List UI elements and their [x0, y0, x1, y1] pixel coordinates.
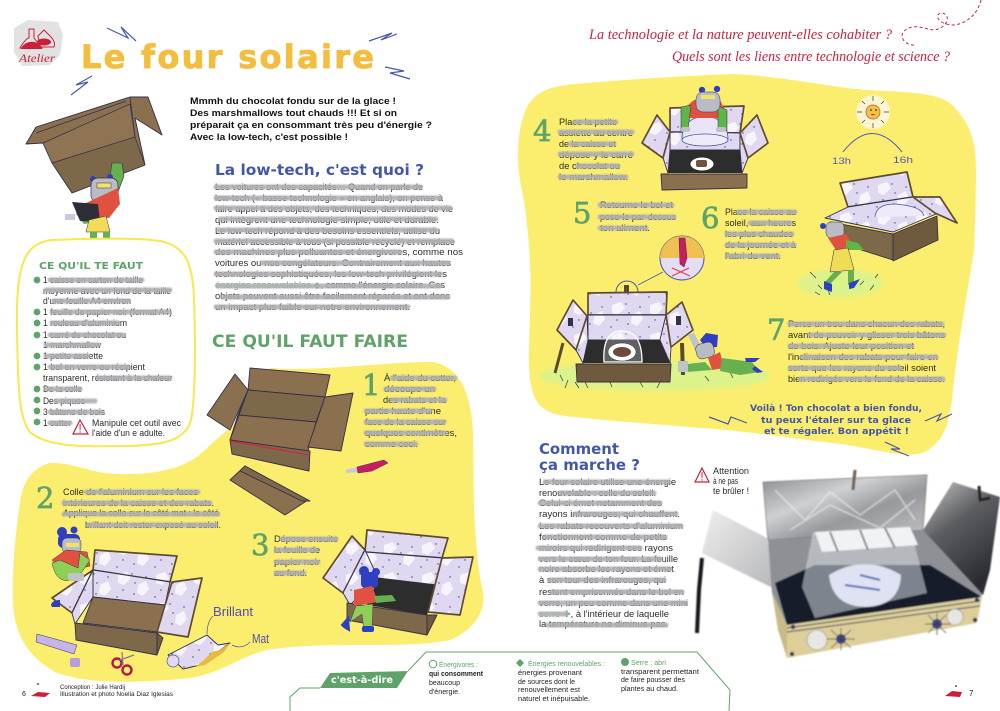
step 6 text: les plus chaudes	[725, 229, 793, 239]
text block: how it works: serre ✚, à l'intérieur de laquelle	[539, 609, 669, 619]
step 4 text: de chocolat ou	[559, 161, 620, 171]
foil roll with labels: Brillant	[213, 604, 253, 619]
text block: low-tech: technologies sophistiquées, les low-tech privilégient les	[215, 269, 447, 279]
icon: sun with time arc: 16h	[893, 155, 913, 165]
step 1 text: découpe un	[384, 384, 435, 394]
page number and credits: left: Illustration et photo Noelia Diaz Iglesias	[60, 691, 173, 698]
step 4 text: Place la petite	[559, 117, 617, 127]
step 2 text: intérieures de la caisse et des rabats.	[63, 498, 214, 508]
page number and credits: left: Conception : Julie Hardij	[60, 684, 125, 691]
step 1 text: quelques centimètres,	[365, 428, 457, 438]
illustration: robot lifting a box	[26, 97, 162, 250]
list text: 3 bâtons de bois	[43, 407, 105, 417]
step 5 text: 5	[573, 196, 591, 230]
step 1 text	[362, 368, 457, 449]
text block: how it works: fonctionnent comme de petits	[539, 532, 667, 542]
heading: comment ça marche: ça marche ?	[539, 456, 640, 474]
definition: serre: plantes au chaud.	[621, 686, 678, 693]
red questions: La technologie et la nature peuvent-elles cohabiter ?	[588, 27, 893, 43]
photo: real solar oven	[697, 470, 1000, 658]
text block: low-tech: des machines plus polluantes et énergivores, comme nos	[215, 247, 463, 257]
page number: right	[945, 685, 974, 698]
title: Le four solaire	[81, 38, 374, 76]
step 1 illustration: cut box	[207, 368, 353, 471]
definition: énergies renouvelables: de sources dont le	[518, 679, 575, 686]
step 7 text: avant de pouvoir y glisser trois bâtons	[788, 330, 945, 340]
cut flap piece	[230, 466, 310, 515]
lightning bolts around title	[71, 27, 410, 95]
text block: low-tech: objets peuvent aussi être facilement réparés et ont donc	[215, 291, 450, 301]
step 6 text: 6	[701, 201, 719, 235]
step 3 illustration: black paper in box	[323, 530, 473, 635]
text block: how it works: rayons infrarouges, qui chauffent.	[539, 509, 680, 519]
step 5 text	[573, 196, 676, 233]
step 6 text: soleil, aux heures	[725, 218, 796, 228]
supplies: glue stick, glue cap, scissors	[36, 634, 134, 674]
red questions: Quels sont les liens entre technologie et science ?	[672, 49, 951, 65]
step 4 text: dépose-y le carré	[559, 150, 633, 160]
step 7 text: sorte que les rayons du soleil soient	[788, 363, 936, 373]
text block: low-tech: énergies renouvelables ◆, comme l'énergie solaire. Ces	[215, 280, 445, 290]
text block: low-tech: qui intègrent une technologie simple, utile et durable.	[215, 215, 439, 225]
logo: Atelier badge	[14, 20, 63, 66]
text block: low-tech	[215, 182, 463, 312]
warning text: Manipule cet outil avec	[92, 418, 181, 428]
step 6 text: l'abri du vent.	[725, 251, 781, 261]
definition: énergivores	[429, 660, 484, 696]
list text: 1 feuille de papier noir (format A4)	[43, 307, 172, 317]
heading: comment ça marche	[539, 440, 640, 474]
foil roll with labels: Mat	[252, 631, 269, 646]
page number and credits: left	[22, 683, 173, 698]
text block: low-tech: Les voitures ont des capacités… Quand on parle de	[215, 182, 423, 192]
step 1 text: face de la caisse sur	[365, 417, 446, 427]
intro text: Mmmh du chocolat fondu sur de la glace !	[190, 96, 396, 107]
step 6 text	[701, 201, 797, 261]
definition: énergivores: beaucoup	[429, 680, 460, 687]
dotted swirl	[902, 0, 981, 45]
step 2 text	[36, 481, 221, 530]
text block: low-tech: voitures ou nos congélateurs. Contrairement aux hautes	[215, 258, 451, 268]
list text: 1 bol en verre ou récipient	[43, 362, 145, 372]
yellow background: right page steps	[518, 74, 976, 455]
step 5 text: Retourne le bol et	[600, 200, 673, 210]
definition: serre	[621, 658, 699, 693]
definition: énergies renouvelables	[516, 659, 605, 703]
warning: do not burn yourself: Attention	[713, 466, 749, 476]
list text: 1 rouleau d'aluminium	[43, 318, 127, 328]
list text	[43, 275, 172, 428]
warning: do not burn yourself	[695, 466, 749, 496]
list text: Des piques	[43, 396, 85, 406]
definition: énergies renouvelables: Énergies renouvelables :	[528, 659, 605, 668]
step 3 text: au fond.	[274, 568, 307, 578]
definition: énergies renouvelables: énergies provenant	[518, 670, 582, 677]
text block: how it works: Les rabats recouverts d'aluminium	[539, 521, 683, 531]
step 6 text: de la journée et à	[725, 240, 797, 250]
intro text: préparait ça en consommant très peu d'énergie ?	[190, 120, 432, 131]
icon: cutter	[345, 460, 388, 473]
definition: énergivores: qui consomment	[429, 671, 484, 678]
definition: serre: Serre : abri	[631, 660, 666, 667]
logo: Atelier badge: Atelier	[18, 51, 55, 65]
text block: how it works: noire absorbe les rayons et émet	[539, 564, 674, 574]
step 1 text: comme ceci.	[365, 439, 418, 449]
list text: 1 marshmallow	[43, 340, 101, 350]
conclusion text: Voilà ! Ton chocolat a bien fondu,	[750, 404, 922, 414]
step 4 text	[533, 114, 633, 182]
heading: CE QU'IL TE FAUT: CE QU'IL TE FAUT	[39, 261, 143, 272]
warning: do not burn yourself: à ne pas	[713, 476, 738, 486]
step 7 text: de bois. Ajuste leur position et	[788, 341, 914, 351]
panel: what you need	[17, 239, 195, 446]
text block: low-tech: Le low-tech répond à des besoins essentiels, utilise du	[215, 226, 440, 236]
outline: definitions box	[290, 652, 730, 711]
text block: how it works	[538, 477, 688, 629]
text block: how it works: miroirs qui redirigent ces rayons	[539, 543, 673, 553]
definition: énergivores: d'énergie.	[429, 689, 460, 696]
red questions	[588, 27, 951, 65]
list text: transparent, résistant à la chaleur	[43, 373, 172, 383]
warning icon	[73, 420, 88, 434]
intro text	[190, 96, 432, 143]
heading: comment ça marche: Comment	[539, 440, 619, 458]
conclusion text	[750, 404, 922, 437]
list text: 1 cutter	[43, 418, 71, 428]
step 5 text: ton aliment.	[600, 223, 650, 233]
page number and credits: left: 6	[22, 691, 26, 698]
step 5 text: pose-le par-dessus	[600, 212, 676, 222]
definition: serre: transparent permettant	[621, 669, 699, 676]
definition: énergies renouvelables: renouvellement est	[518, 687, 580, 694]
step 3 text: la feuille de	[274, 545, 320, 555]
text block: low-tech: faire appel à des objets, des techniques, des modes de vie	[215, 204, 453, 214]
warning text: l'aide d'un e adulte.	[92, 428, 165, 438]
step 7 text	[767, 313, 945, 384]
step 2 illustration: foil-lined box with robot	[51, 526, 202, 655]
step 7 text: bien redirigés vers le fond de la caisse.	[788, 374, 945, 384]
text block: how it works: renouvelable : celle du soleil.	[539, 488, 656, 498]
list text: d'une feuille A4 environ	[43, 296, 131, 306]
step 3 text: 3	[251, 528, 269, 562]
step 3 text: Dépose ensuite	[274, 534, 338, 544]
banner: c'est-à-dire	[320, 671, 408, 688]
conclusion text: et te régaler. Bon appétit !	[764, 426, 909, 437]
warning: do not burn yourself: te brûler !	[713, 486, 749, 496]
banner: c'est-à-dire: c'est-à-dire	[331, 675, 393, 686]
list bullets	[34, 277, 40, 425]
step 2 text: Applique la colle sur le côté mat : le côté	[63, 508, 219, 518]
text block: how it works: Le four solaire utilise une énergie	[539, 477, 676, 487]
definition: énergivores: Énergivores :	[439, 660, 478, 669]
step 7 text: l'inclinaison des rabats pour faire en	[788, 352, 938, 362]
page number: right: 7	[969, 689, 974, 698]
intro text: Des marshmallows tout chauds !!! Et si on	[190, 108, 397, 119]
step 2 text: Colle de l'aluminium sur les faces	[63, 487, 198, 497]
list text: 1 carré de chocolat ou	[43, 330, 126, 340]
list text: 1 petite assiette	[43, 351, 103, 361]
step 1 text: des rabats et la	[383, 395, 447, 405]
heading: low-tech: La low-tech, c'est quoi ?	[215, 161, 424, 179]
lightning bolts around conclusion	[709, 414, 952, 456]
list text: moyenne avec un fond de la taille	[43, 286, 171, 296]
heading: CE QU'IL FAUT FAIRE: CE QU'IL FAUT FAIRE	[212, 332, 408, 352]
yellow background: left page steps	[13, 362, 483, 682]
text block: low-tech: un impact plus faible sur notre environnement.	[215, 302, 410, 312]
step 1 text: partie haute d'une	[365, 406, 441, 416]
icon: sun with time arc	[832, 95, 913, 166]
text block: how it works: vers le cœur de ton four. La feuille	[539, 554, 678, 564]
conclusion text: tu peux l'étaler sur ta glace	[761, 415, 911, 426]
definition: serre: de faire pousser des	[621, 677, 685, 684]
step 7 illustration: oven in grass with robot	[539, 292, 771, 391]
step 4 text: de la caisse et	[559, 139, 616, 149]
icon: sun with time arc: 13h	[832, 156, 851, 166]
step 1 text: 1	[362, 368, 380, 402]
text block: how it works: la température ne diminue pas.	[539, 619, 668, 629]
text block: low-tech: matériel accessible à tous (si possible recyclé) et remplace	[215, 237, 455, 247]
step 6 illustration: robot carrying box on grass	[797, 172, 957, 297]
warning text	[92, 418, 181, 438]
text block: how it works: à son tour des infrarouges, qui	[539, 575, 666, 585]
list text: De la colle	[43, 384, 82, 394]
text block: low-tech: low-tech (« basse technologie » en anglais), on pense à	[215, 193, 444, 203]
step 2 text: brillant doit rester exposé au soleil.	[85, 520, 221, 530]
smudges over list	[46, 280, 170, 423]
step 3 text	[251, 528, 338, 578]
text block: how it works: Celui-ci émet notamment des	[539, 498, 662, 508]
step 7 text: Perce un trou dans chacun des rabats,	[788, 319, 945, 329]
step 7 text: 7	[767, 313, 785, 347]
step 4 text: assiette au centre	[559, 128, 633, 138]
intro text: Avec la low-tech, c'est possible !	[190, 132, 348, 143]
step 3 text: papier noir	[274, 557, 320, 567]
step 1 text: À l'aide du cutter,	[384, 373, 456, 383]
step 4 illustration: robot placing bowl	[642, 86, 768, 190]
text block: how it works: verre, un peu comme dans une mini	[539, 598, 688, 608]
step 4 text: 4	[533, 114, 551, 148]
step 2 text: 2	[36, 481, 54, 515]
foil roll with labels	[167, 604, 269, 669]
definition: énergies renouvelables: naturel et inépuisable.	[518, 696, 590, 703]
step 6 text: Place la caisse au	[725, 207, 796, 217]
step 4 text: le marshmallow.	[559, 172, 628, 182]
list text: 1 caisse en carton de taille	[43, 275, 143, 285]
step 5 illustration: inset magnifier on stick	[616, 236, 704, 303]
text block: how it works: restent emprisonnés dans le bol en	[539, 587, 684, 597]
